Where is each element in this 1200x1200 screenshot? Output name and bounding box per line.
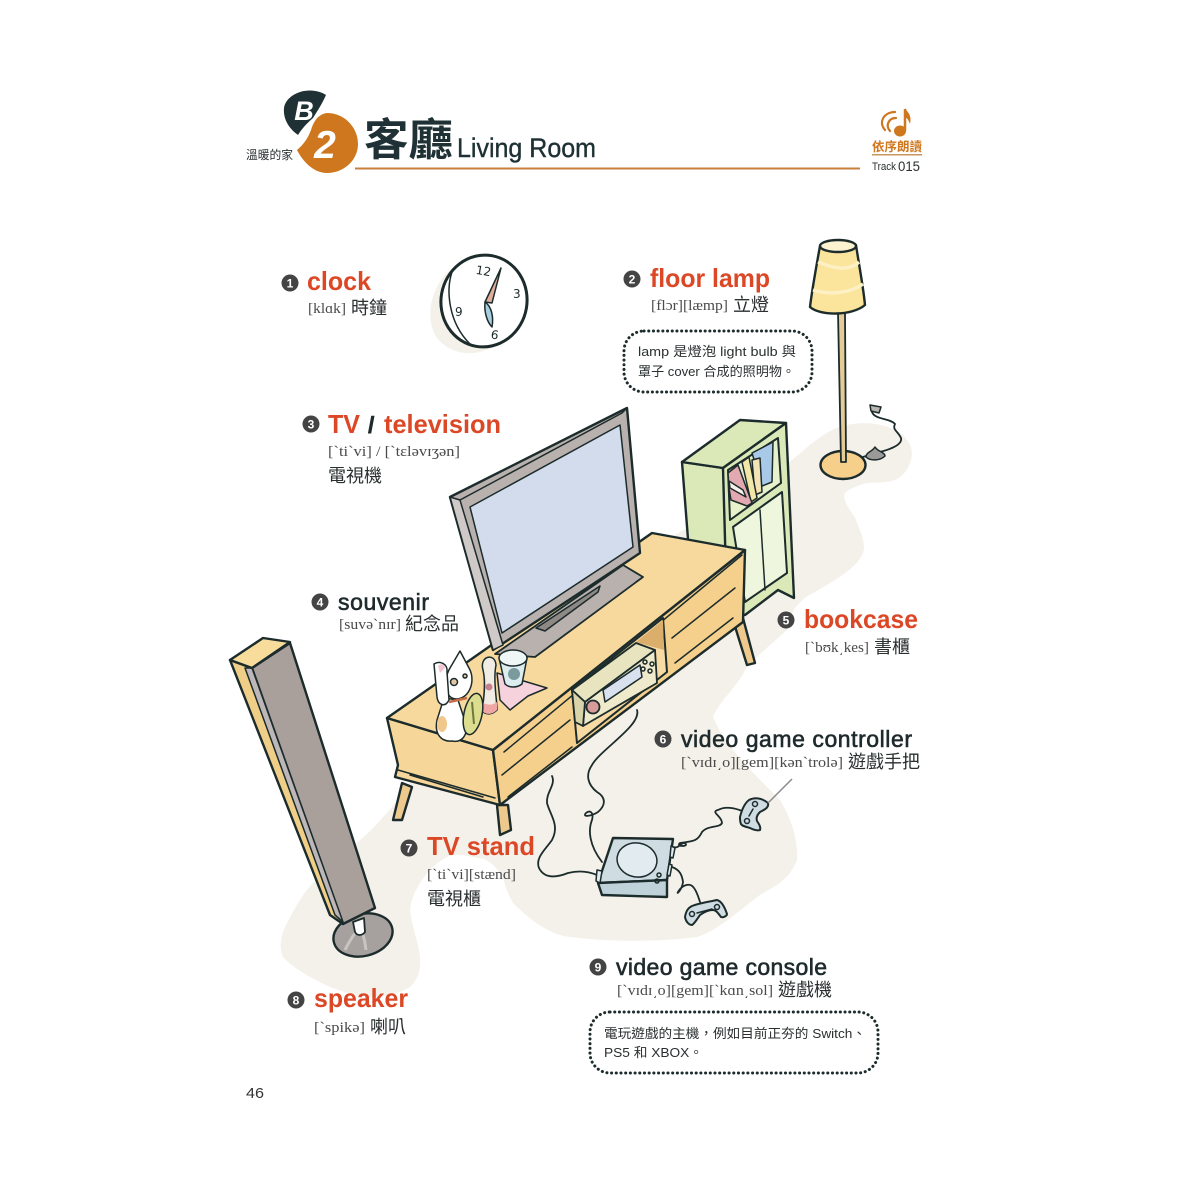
pointer line <box>768 779 792 803</box>
icon: audio track <box>872 108 922 174</box>
label 1: clock: clock <box>307 266 372 296</box>
floor background shape <box>281 423 912 997</box>
lower door <box>733 492 787 602</box>
callout: console note <box>590 1012 878 1073</box>
TV screen <box>470 425 633 633</box>
label 7: TV stand: [ˋtiˋvi][stænd] <box>427 867 516 883</box>
illustration: cables <box>538 710 742 902</box>
label 3: TV / television: TV <box>328 409 361 439</box>
illustration: speaker <box>230 638 397 963</box>
label 7: TV stand: 7 <box>406 842 413 856</box>
label 5: bookcase: bookcase <box>804 604 918 634</box>
illustration: game controller bottom <box>685 900 727 925</box>
label 4: souvenir: [suvəˋnɪr] <box>339 617 401 633</box>
callout: console note: PS5 和 XBOX。 <box>604 1045 703 1060</box>
callout: console note: 電玩遊戲的主機，例如目前正夯的 Switch、 <box>604 1026 866 1041</box>
label 1: clock: [klɑk] <box>308 301 346 317</box>
speaker side <box>230 660 343 924</box>
label 3: TV / television: 電視機 <box>328 462 382 488</box>
label 4: souvenir: 4 <box>317 596 324 610</box>
label 1: clock: 時鐘 <box>351 294 387 320</box>
illustration: floor lamp <box>810 240 901 479</box>
title English: Living Room <box>457 133 596 163</box>
kokeshi doll <box>482 657 497 714</box>
stand top <box>387 533 745 750</box>
label 6: video game controller: [ˋvɪdɪ͵o][gem][kənˋtrolə] <box>681 755 843 771</box>
label 5: bookcase: [ˋbʊk͵kes] <box>805 640 869 656</box>
illustration: clock: 3 <box>513 287 521 301</box>
upper shelf <box>728 438 781 520</box>
illustration: bookcase <box>682 420 794 615</box>
label 5: bookcase: 書櫃 <box>874 633 910 659</box>
maneki-neko cat <box>434 651 486 741</box>
TV base <box>495 565 643 657</box>
TV body <box>450 408 640 650</box>
illustration: TV stand legs <box>393 618 755 835</box>
speaker base <box>329 907 397 963</box>
label 8: speaker: 8 <box>293 994 300 1008</box>
label 2: floor lamp: 立燈 <box>733 291 769 317</box>
callout: lamp note: 罩子 cover 合成的照明物。 <box>638 364 795 379</box>
label 2: floor lamp: 2 <box>629 272 636 286</box>
label 8: speaker: speaker <box>314 983 408 1013</box>
label 3: TV / television: 3 <box>308 418 315 432</box>
illustration: game controller top <box>740 798 768 830</box>
label 3: TV / television: / <box>368 412 375 438</box>
track label: 依序朗讀 <box>872 136 922 155</box>
speaker top <box>230 638 290 668</box>
cup <box>499 650 527 687</box>
page number: 46 <box>246 1085 264 1102</box>
label 3: TV / television: television <box>384 409 501 439</box>
label 2: floor lamp: [flɔr][læmp] <box>651 298 728 314</box>
console front <box>598 880 667 897</box>
illustration: clock: 6 <box>490 327 500 343</box>
drawer lines <box>398 555 742 798</box>
receiver <box>572 643 657 726</box>
stand front face <box>493 550 745 805</box>
bookcase front <box>723 423 794 615</box>
track number: Track <box>872 161 896 173</box>
console top <box>598 838 673 883</box>
illustration: television <box>450 408 643 657</box>
label 1: clock <box>282 266 387 320</box>
label 2: floor lamp: floor lamp <box>650 263 770 293</box>
lamp shade <box>810 245 865 314</box>
label 6: video game controller: 遊戲手把 <box>848 748 920 774</box>
label 4: souvenir: souvenir <box>338 589 429 615</box>
books <box>728 442 773 506</box>
title underline <box>355 168 860 170</box>
label 7: TV stand: 電視櫃 <box>427 885 481 911</box>
label 9: video game console: [ˋvɪdɪ͵o][gem][ˋkɑn͵sol] <box>617 983 773 999</box>
badge: B <box>284 91 326 135</box>
label 9: video game console: 遊戲機 <box>778 976 832 1002</box>
open compartment <box>572 618 667 743</box>
bookcase side <box>682 462 730 565</box>
label 1: clock: 1 <box>287 276 294 290</box>
label 4: souvenir <box>312 589 459 636</box>
label 8: speaker <box>288 983 408 1039</box>
label 6: video game controller <box>654 726 920 774</box>
stand left face <box>387 718 500 805</box>
label 9: video game console: video game console <box>616 954 827 980</box>
illustration: TV stand <box>387 533 745 805</box>
illustration: clock: 9 <box>455 305 463 319</box>
lamp pole <box>838 312 846 462</box>
label 4: souvenir: 紀念品 <box>405 610 459 636</box>
label 5: bookcase: 5 <box>783 614 790 628</box>
illustration: souvenirs <box>434 650 547 741</box>
label 6: video game controller: video game controller <box>681 726 912 752</box>
label 2: floor lamp <box>624 263 770 317</box>
cushion <box>497 673 547 710</box>
icon: music note with sound waves <box>882 108 911 136</box>
title Chinese: 客廳 <box>364 104 453 168</box>
lamp base <box>820 451 866 479</box>
label 9: video game console <box>590 954 832 1002</box>
section label: 溫暖的家 <box>246 147 293 162</box>
bookcase top <box>682 420 786 468</box>
callout: lamp note <box>624 331 812 392</box>
speaker front <box>252 643 375 924</box>
illustration: clock <box>430 248 534 354</box>
label 6: video game controller: 6 <box>660 732 667 746</box>
label 7: TV stand: TV stand <box>427 831 535 861</box>
console disc <box>614 840 660 880</box>
label 8: speaker: [ˋspikə] <box>314 1020 365 1036</box>
icon: audio track: 015 <box>898 158 920 174</box>
header: section title <box>246 91 860 173</box>
illustration: clock: 12 <box>475 263 492 279</box>
label 8: speaker: 喇叭 <box>370 1013 406 1039</box>
label 9: video game console: 9 <box>595 960 602 974</box>
callout: lamp note: lamp 是燈泡 light bulb 與 <box>638 344 796 359</box>
label 7: TV stand <box>400 831 535 911</box>
badge: B: B <box>294 96 314 126</box>
label 3: TV / television: [ˋtiˋvi] / [ˋtɛləvɪʒən] <box>328 444 460 460</box>
badge: 2 <box>297 113 358 173</box>
power cord and plug <box>863 412 901 457</box>
badge: 2: 2 <box>313 124 336 167</box>
illustration: video game console <box>596 838 675 897</box>
label 3: TV / television <box>302 409 501 488</box>
label 5: bookcase <box>778 604 918 659</box>
